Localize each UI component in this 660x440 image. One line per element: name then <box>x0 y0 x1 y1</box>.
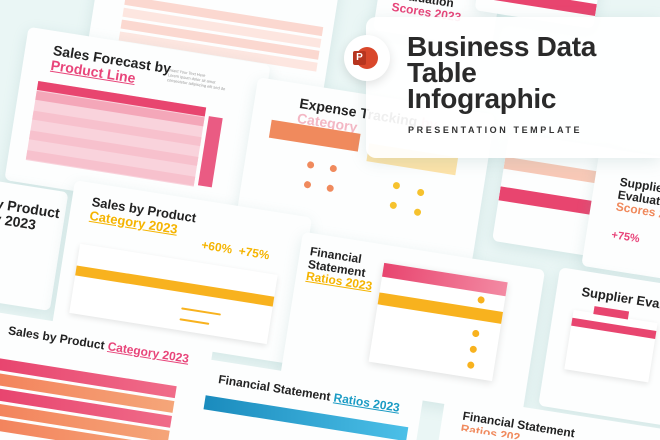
stats: +60% +75% <box>200 238 270 262</box>
heading: Statement <box>307 257 367 280</box>
slide: Financial Statement Ratios 2023 (orange) <box>438 404 660 440</box>
slide: Sales by Product Category 2023 (yellow) <box>52 180 312 364</box>
slide: Sales Forecast by Product Line <box>4 27 271 218</box>
slide: Expense Tracking by Category <box>235 77 495 263</box>
icon: powerpoint <box>344 35 390 81</box>
table <box>26 81 206 187</box>
heading: Category 2023 <box>89 208 179 236</box>
slide: Sales by Product Category 2023 (pink) <box>0 312 212 440</box>
text block: Insert Your Text Here <box>168 67 206 78</box>
heading <box>305 244 373 293</box>
title <box>407 31 596 114</box>
slide: Supplier Evaluation Scores (right edge): +75% <box>611 229 640 245</box>
heading: Financial <box>309 244 363 266</box>
heading: Ratios 2023 <box>305 269 373 293</box>
slide: Financial Statement Ratios 2023 (blue) <box>198 360 423 440</box>
heading: Product Line <box>50 57 137 86</box>
heading: Sales by Product <box>91 194 197 225</box>
slide: top table (partial) <box>86 0 344 93</box>
heading: Expense Tracking by Category <box>296 95 439 135</box>
table <box>564 310 658 382</box>
heading: Sales Forecast by <box>52 42 172 76</box>
heading: Sales by Product Category 2023: Sales by Product Category 2023 <box>7 324 190 366</box>
title: Infographic <box>407 83 556 114</box>
icon: powerpoint: P <box>356 52 363 63</box>
table <box>369 263 508 381</box>
slide: top-right evaluation scores: Scores 2023 <box>391 0 462 24</box>
subtitle: PRESENTATION TEMPLATE <box>408 125 582 135</box>
bars <box>0 358 177 440</box>
title: Table <box>407 57 477 88</box>
slide: Supplier Evaluation <box>538 267 660 437</box>
table <box>69 244 278 344</box>
title: Business Data <box>407 31 596 62</box>
slide: right payments table <box>492 132 618 258</box>
text block: Lorem ipsum dolor sit amet consectetur adipiscing elit sed do <box>167 72 226 91</box>
slide: Supplier Evaluation Scores (right edge) <box>581 147 660 283</box>
slide: top-right table (partial) <box>474 0 606 29</box>
slide: left partial Sales by Product <box>0 169 68 311</box>
slide: Financial Statement Ratios 2023 (yellow/pink) <box>280 232 545 416</box>
heading: Financial Statement Ratios 2023 (blue): Financial Statement Ratios 2023 <box>217 373 401 415</box>
table header <box>204 395 408 440</box>
table <box>269 120 361 152</box>
header panel <box>366 17 660 158</box>
slide: top-right evaluation scores <box>373 0 507 49</box>
